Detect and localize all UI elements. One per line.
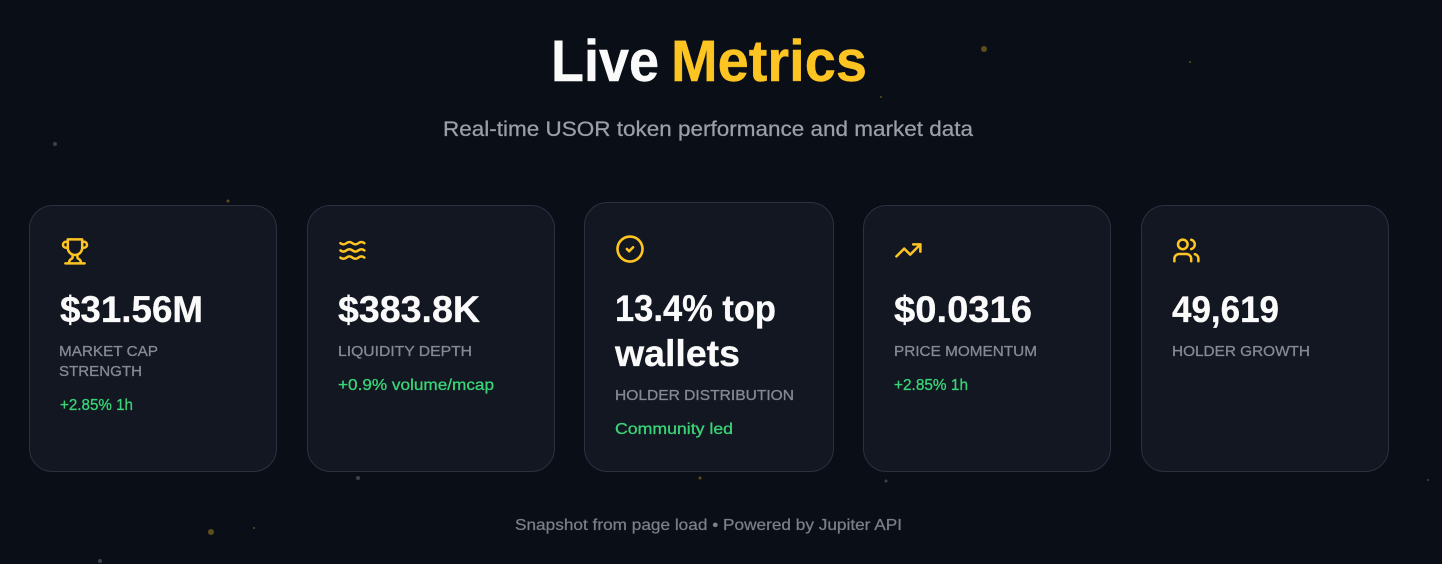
icon: trophy (63, 239, 87, 263)
title: Live (551, 29, 659, 94)
value: wallets (614, 333, 740, 374)
value: 13.4% top (615, 288, 776, 329)
value: $0.0316 (894, 289, 1032, 330)
icon: users (1174, 240, 1198, 261)
change: Community led (615, 421, 733, 438)
panel: holder growth (1142, 206, 1388, 472)
panel: liquidity depth (308, 206, 554, 472)
label (59, 343, 158, 380)
label: HOLDER GROWTH (1172, 343, 1310, 360)
title (551, 29, 867, 94)
panel: market cap (30, 206, 276, 472)
value (614, 288, 776, 374)
panel: price momentum (864, 206, 1110, 472)
value: 49,619 (1172, 289, 1279, 330)
footer note: Snapshot from page load • Powered by Jupiter API (515, 517, 902, 534)
title: Metrics (671, 29, 867, 94)
subtitle: Real-time USOR token performance and market data (443, 118, 973, 141)
label: LIQUIDITY DEPTH (338, 343, 472, 360)
change: +0.9% volume/mcap (338, 377, 494, 394)
value: $383.8K (338, 289, 480, 330)
icon: waves (340, 242, 364, 259)
change: +2.85% 1h (894, 377, 968, 394)
label: MARKET CAP (59, 343, 158, 360)
icon: trending up (896, 244, 920, 256)
value: $31.56M (60, 289, 203, 330)
panel: holder distribution (584, 202, 834, 472)
label: HOLDER DISTRIBUTION (615, 387, 794, 404)
icon: circle check (618, 236, 642, 262)
label: PRICE MOMENTUM (894, 343, 1037, 360)
label: STRENGTH (59, 363, 142, 380)
change: +2.85% 1h (60, 397, 133, 414)
